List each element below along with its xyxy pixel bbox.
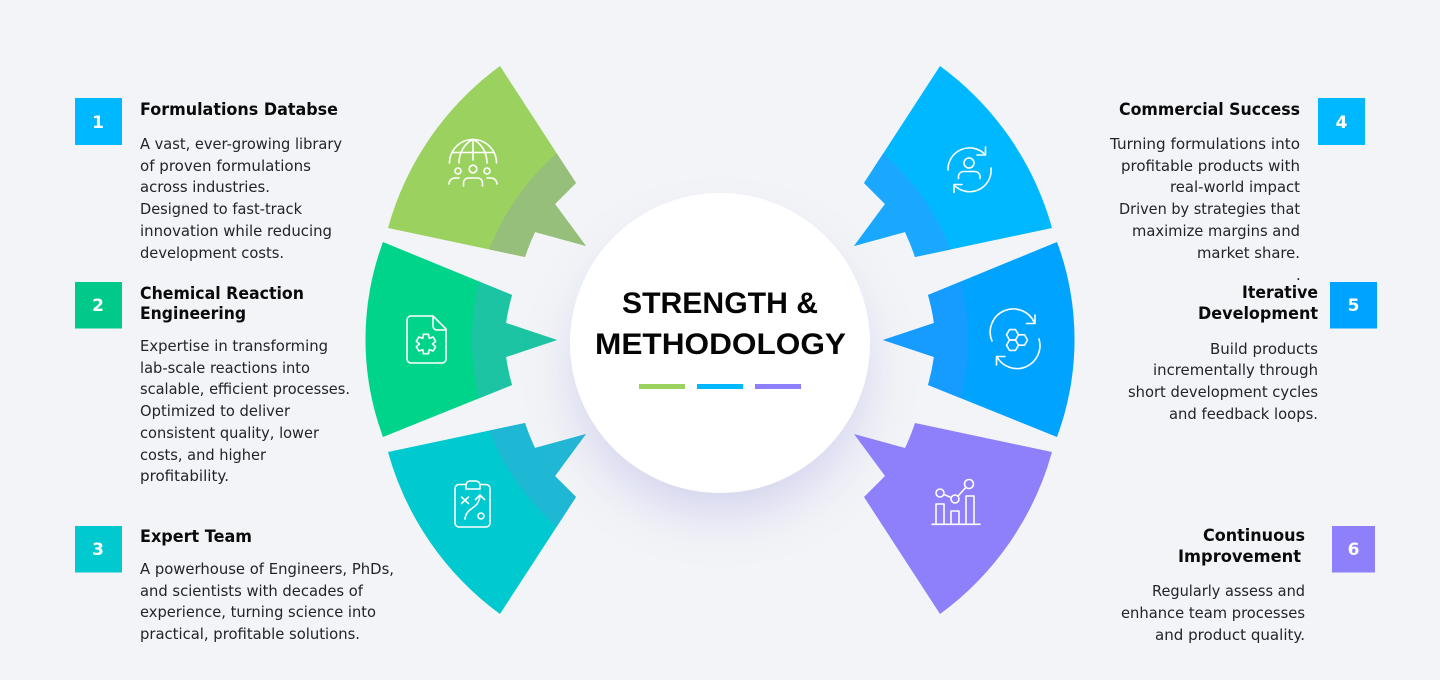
text 1: of proven formulations [140, 157, 311, 175]
heading 6 [1178, 526, 1305, 567]
item 5: Iterative Development [1128, 282, 1377, 423]
text 2: costs, and higher [140, 446, 267, 464]
icon: bar chart with trend line [932, 480, 980, 524]
item 6: Continuous Improvement [1121, 526, 1375, 644]
item 1: Formulations Databse [75, 98, 342, 262]
icon: document with gear [407, 316, 446, 363]
icon: molecule in refresh arrows [990, 309, 1040, 369]
heading 3: Expert Team [140, 527, 252, 547]
text 1: innovation while reducing [140, 222, 332, 240]
text 1: A vast, ever-growing library [140, 135, 342, 153]
text 2 [140, 337, 350, 485]
heading 1: Formulations Databse [140, 100, 338, 120]
number badge 1: 1 [92, 113, 104, 133]
text 4: market share. [1197, 244, 1300, 262]
heading 6: Improvement [1178, 547, 1301, 567]
text 2: consistent quality, lower [140, 424, 320, 442]
petal 4: sky blue [854, 66, 1052, 257]
text 6: and product quality. [1155, 626, 1305, 644]
heading 5 [1198, 283, 1318, 324]
heading 5: Development [1198, 304, 1318, 324]
text 5: short development cycles [1128, 383, 1318, 401]
text 3 [140, 560, 394, 643]
text 5: incrementally through [1153, 361, 1318, 379]
number badge 2 [75, 282, 122, 328]
text 2: scalable, efficient processes. [140, 380, 350, 398]
text 1: development costs. [140, 244, 284, 262]
text 1: across industries. [140, 178, 270, 196]
item 3: Expert Team [75, 526, 394, 643]
text 6: enhance team processes [1121, 604, 1305, 622]
text 4: maximize margins and [1132, 222, 1300, 240]
text 2: profitability. [140, 467, 229, 485]
text 3: experience, turning science into [140, 603, 376, 621]
heading 2: Chemical Reaction [140, 284, 304, 304]
number badge 4: 4 [1336, 113, 1348, 133]
icon: person in refresh arrows [948, 147, 991, 192]
petal 5: blue [883, 242, 1075, 437]
number badge 3 [75, 526, 122, 572]
icon: globe with people [449, 140, 497, 186]
text 6: Regularly assess and [1152, 582, 1305, 600]
center circle [570, 193, 870, 493]
number badge 1 [75, 98, 122, 145]
text 4: Turning formulations into [1109, 135, 1300, 153]
item 4: Commercial Success [1109, 98, 1365, 284]
number badge 5 [1330, 282, 1377, 328]
number badge 6: 6 [1348, 540, 1359, 560]
text 4: Driven by strategies that [1119, 200, 1300, 218]
text 4: . [1296, 266, 1301, 284]
number badge 3: 3 [92, 540, 104, 560]
heading 6: Continuous [1203, 526, 1305, 546]
number badge 5: 5 [1348, 296, 1359, 316]
heading 2: Engineering [140, 304, 246, 324]
title accent bars [639, 384, 801, 389]
icon: clipboard with play diagram [455, 481, 490, 527]
number badge 4 [1318, 98, 1365, 145]
heading 2 [140, 284, 304, 324]
text 3: and scientists with decades of [140, 582, 364, 600]
number badge 2: 2 [92, 296, 104, 316]
text 2: Expertise in transforming [140, 337, 328, 355]
text 1: Designed to fast-track [140, 200, 302, 218]
text 2: Optimized to deliver [140, 402, 291, 420]
text 5: Build products [1210, 340, 1318, 358]
title: METHODOLOGY [595, 328, 846, 361]
center circle shadow [578, 234, 862, 510]
heading 4: Commercial Success [1119, 100, 1300, 120]
text 3: practical, profitable solutions. [140, 625, 360, 643]
text 5: and feedback loops. [1169, 405, 1318, 423]
text 1 [140, 135, 342, 262]
petal 1: green [388, 66, 586, 257]
title [595, 287, 846, 361]
text 3: A powerhouse of Engineers, PhDs, [140, 560, 394, 578]
heading 5: Iterative [1242, 283, 1318, 303]
text 4: profitable products with [1121, 157, 1300, 175]
petal 3: teal [388, 423, 586, 614]
text 5 [1128, 340, 1318, 423]
item 2: Chemical Reaction Engineering [75, 282, 350, 485]
petal 2: emerald [365, 242, 557, 437]
text 4 [1109, 135, 1301, 284]
text 4: real-world impact [1170, 178, 1300, 196]
number badge 6 [1332, 526, 1375, 572]
text 2: lab-scale reactions into [140, 359, 310, 377]
text 6 [1121, 582, 1305, 644]
petal 6: violet [854, 423, 1052, 614]
title: STRENGTH & [622, 287, 818, 320]
